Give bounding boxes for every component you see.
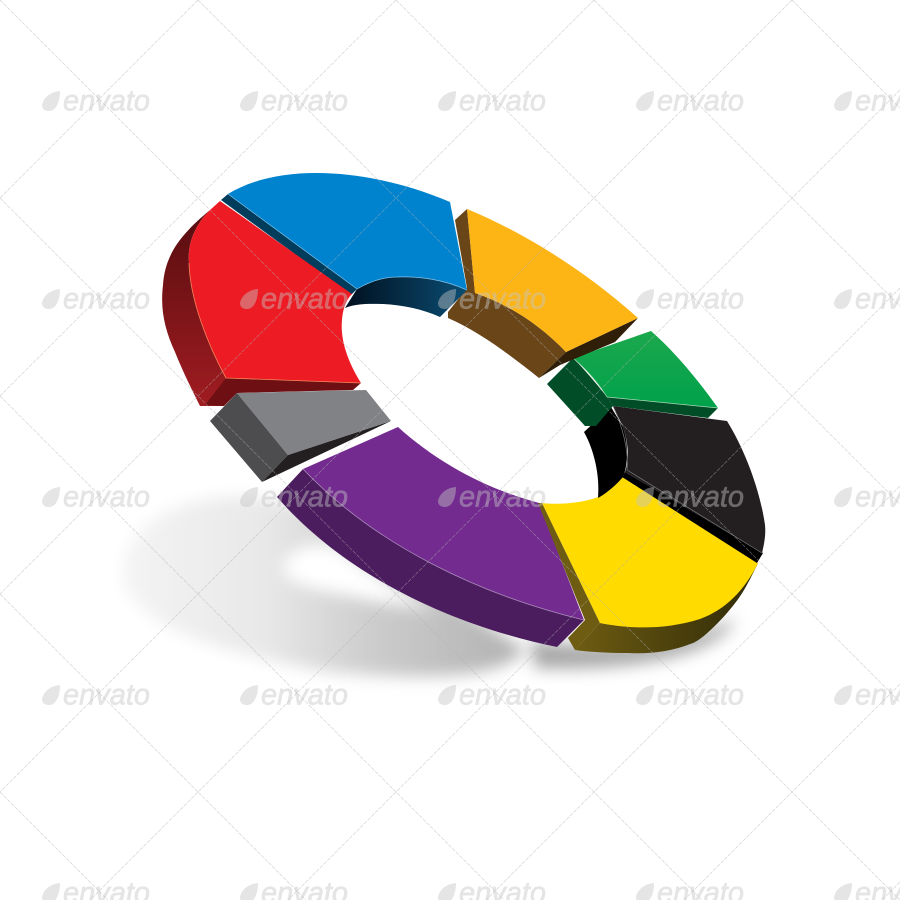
segment: gold — [448, 209, 638, 378]
gold dark underside — [539, 318, 638, 378]
watermark: envato repeated: envato — [63, 678, 150, 712]
segment: black — [584, 406, 765, 563]
yellow cut side — [538, 503, 600, 650]
segment: yellow — [538, 477, 758, 653]
watermark: envato repeated: envato — [63, 282, 150, 316]
grey left face — [210, 393, 288, 482]
black inner wall — [584, 407, 627, 498]
blue top face — [228, 173, 467, 290]
watermark: envato repeated: envato — [261, 282, 348, 316]
watermark: envato repeated: envato — [657, 678, 744, 712]
watermark: envato repeated: envato — [657, 480, 744, 514]
grey top face — [237, 390, 391, 455]
segment: blue — [221, 173, 467, 317]
ground shadow — [123, 497, 735, 676]
watermark: envato repeated: envato — [459, 84, 546, 118]
watermark: envato repeated: envato — [657, 282, 744, 316]
grey underside — [262, 421, 391, 482]
watermark: envato repeated: envato — [657, 84, 744, 118]
watermark: envato repeated: envato — [459, 282, 546, 316]
purple top face — [303, 427, 584, 620]
green lower strip — [607, 397, 718, 418]
purple side face — [277, 469, 584, 647]
yellow top face — [542, 477, 758, 627]
green top face — [573, 331, 718, 408]
green inner wall — [547, 358, 613, 426]
blue cut strip — [221, 194, 357, 295]
watermark: envato repeated: envato — [459, 480, 546, 514]
segment: grey — [210, 390, 391, 482]
watermark: envato repeated: envato — [63, 480, 150, 514]
gold top face — [467, 209, 638, 352]
watermark: envato repeated: envato — [459, 678, 546, 712]
red outer side — [162, 210, 226, 406]
blue inner wall — [345, 277, 467, 317]
watermark: envato repeated: envato — [261, 678, 348, 712]
black cut strip — [622, 472, 763, 563]
watermark: envato repeated: envato — [63, 84, 150, 118]
yellow outer side — [575, 563, 758, 653]
segment: green — [547, 331, 718, 426]
segment: purple — [277, 427, 584, 647]
watermark: envato repeated: envato — [261, 480, 348, 514]
watermark: envato repeated: envato — [261, 84, 348, 118]
segment: red — [162, 201, 361, 406]
black top face — [613, 406, 765, 553]
red top face — [189, 201, 361, 383]
gold cut side — [448, 209, 566, 378]
red lower strip — [205, 378, 361, 406]
